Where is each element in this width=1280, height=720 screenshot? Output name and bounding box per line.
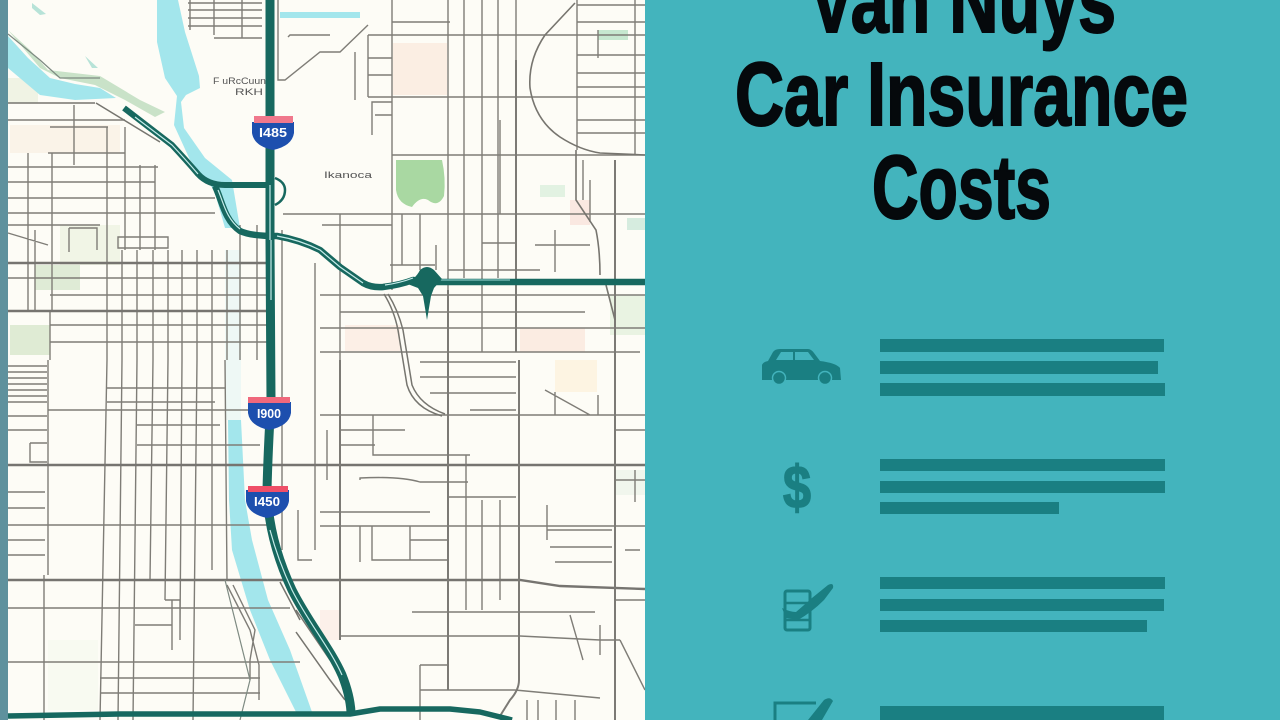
interstate shield: upper [252, 116, 294, 150]
frontage road [8, 103, 445, 416]
map label: upper place: F uRcCuun [213, 76, 266, 86]
map label: lower place: Ikanoca [324, 170, 372, 180]
list item: partial [775, 698, 1164, 720]
text line [880, 706, 1164, 720]
interstate shield: upper: I485 [259, 125, 287, 140]
icon: check box [775, 698, 833, 720]
street grid: arterial roads [8, 263, 645, 589]
list item: checklist [782, 577, 1165, 632]
map label: upper place: RKH [235, 87, 263, 97]
freeways [8, 0, 645, 720]
interstate shield: middle: I900 [257, 406, 281, 421]
icon: clipboard check [782, 584, 833, 630]
list item: vehicle [762, 339, 1165, 396]
interstate shield: middle [248, 397, 291, 430]
interstate shield: lower [246, 486, 289, 518]
interstate shield: lower: I450 [254, 494, 280, 509]
icon: car [762, 349, 841, 380]
panel: sidebar [645, 0, 1280, 720]
park [396, 160, 445, 207]
title [735, 0, 1188, 238]
street grid: minor streets [8, 0, 645, 720]
left edge strip [0, 0, 8, 720]
icon: dollar sign: $ [783, 454, 811, 521]
freeway: northwest branch [124, 108, 266, 185]
text lines [880, 577, 1165, 632]
rivers [8, 0, 360, 712]
map land-use patches [8, 30, 645, 710]
freeway: south [8, 709, 512, 720]
text lines [880, 459, 1165, 514]
curved ring road [530, 3, 645, 320]
text lines [880, 339, 1165, 396]
interchange [405, 267, 442, 320]
title: Costs [872, 138, 1051, 238]
freeway: east-west [215, 186, 645, 287]
panel: map [8, 0, 645, 720]
freeway: north-south [267, 0, 351, 712]
list item: cost [783, 454, 1165, 521]
